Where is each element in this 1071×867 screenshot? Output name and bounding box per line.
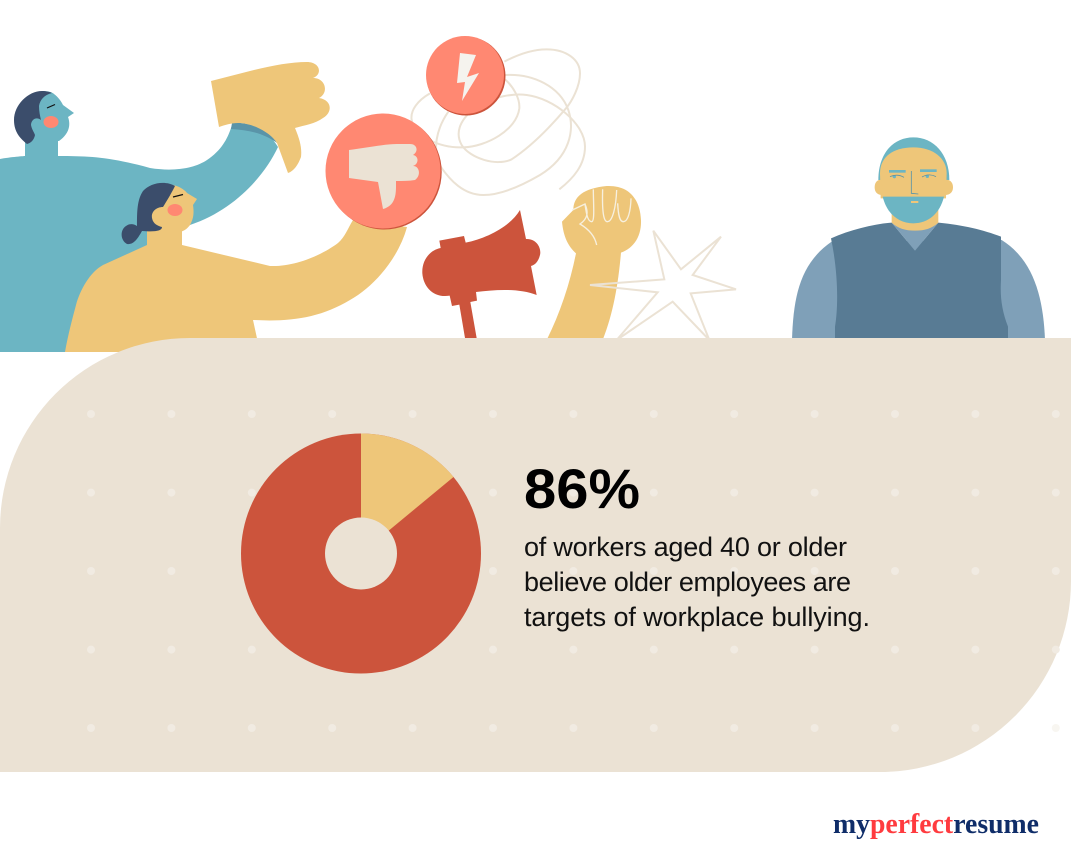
illustration: man in teal with thumbs down [0, 62, 330, 352]
icon: lightning badge [426, 36, 506, 116]
illustration: older man with beard [792, 137, 1045, 340]
eye and nose lines [890, 171, 936, 194]
icon: scribble lines [411, 49, 585, 195]
donut chart: 86 percent [241, 433, 481, 674]
man sleeve cuff [231, 123, 277, 143]
icon: megaphone [422, 210, 540, 340]
text block: statistic description: targets of workplace bullying. [524, 602, 870, 632]
woman body and arm [65, 220, 407, 352]
icon: thumbs-down badge [326, 114, 442, 230]
shirt collar [892, 223, 938, 251]
vest [831, 223, 1008, 340]
illustration: woman in yellow with raised arm [65, 183, 407, 352]
logo: myperfectresume: myperfectresume [833, 809, 1039, 840]
icon: outlined star [590, 231, 736, 340]
neck [892, 207, 938, 231]
eyebrows and eyes [889, 169, 937, 178]
mouth [911, 201, 918, 203]
illustration: raised fist [547, 186, 641, 340]
woman face [150, 185, 197, 232]
woman cheek [168, 204, 182, 216]
text block: statistic description: of workers aged 40 or older [524, 532, 847, 562]
man eye [47, 104, 55, 108]
man cheek [44, 116, 58, 128]
woman ear [152, 208, 168, 224]
man thumbs-down hand [211, 62, 330, 173]
statistic: 86%: 86% [524, 457, 640, 520]
text block: statistic description: believe older employees are [524, 567, 851, 597]
ears [875, 180, 953, 195]
panel: beige statistic panel [0, 338, 1071, 772]
face [880, 147, 947, 198]
woman hair [122, 183, 175, 244]
beard [883, 197, 944, 223]
text block: statistic description [524, 532, 870, 632]
sleeves [792, 240, 1045, 340]
woman eye [173, 194, 183, 197]
hair [878, 137, 949, 180]
man body and raised arm [0, 124, 278, 352]
man face [25, 91, 74, 141]
man hair [14, 91, 52, 144]
dot pattern [87, 410, 1060, 732]
